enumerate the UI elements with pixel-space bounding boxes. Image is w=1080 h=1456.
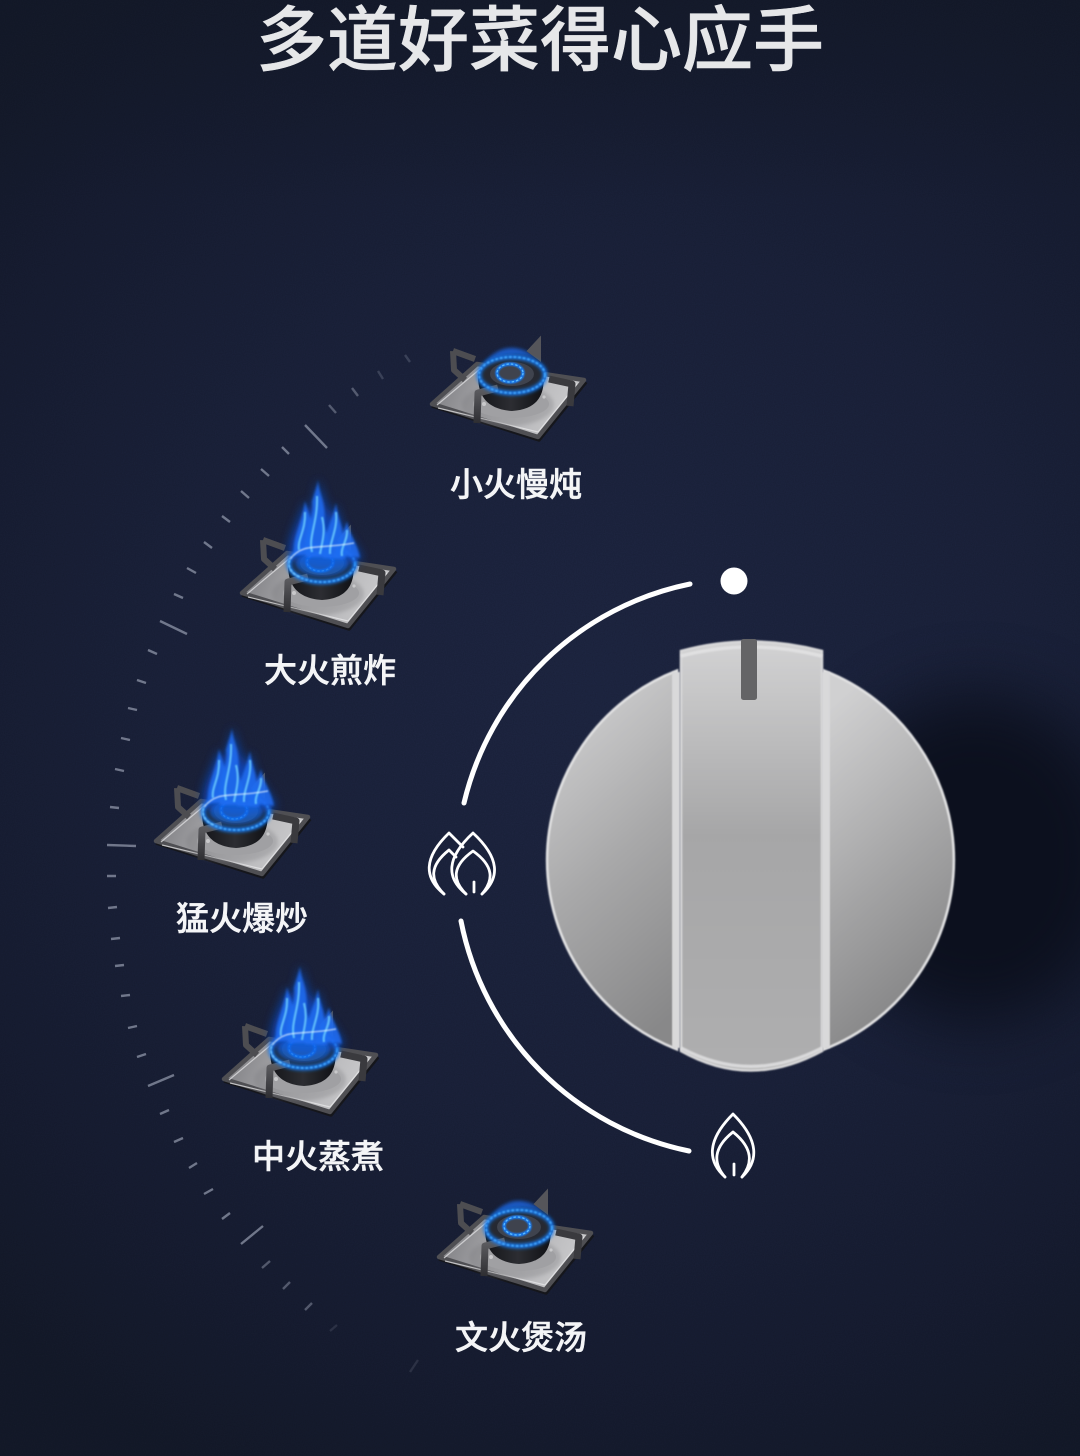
burner: low simmer [432,338,586,440]
bar rims [681,647,822,1066]
arc: high to low [461,921,689,1151]
burner: gentle soup [439,1191,593,1293]
title: 多道好菜得心应手 [256,2,824,81]
label: high fry: 大火煎炸 [264,652,396,689]
label: medium steam: 中火蒸煮 [252,1138,384,1175]
scale ticks arc [107,355,418,1372]
off position dot [720,568,748,594]
knob right wing [824,671,954,1049]
groove highlights [672,672,680,1048]
knob centre bar [681,642,822,1070]
burner: medium steam [224,965,378,1115]
icon: double flame [429,833,495,894]
label: gentle soup: 文火煲汤 [455,1319,587,1356]
icon: single flame [712,1114,754,1177]
label: low simmer: 小火慢炖 [450,466,582,503]
burner: max stir-fry [156,727,310,877]
control knob [547,639,954,1070]
label: max stir-fry: 猛火爆炒 [176,900,308,937]
burner: high fry [242,479,396,629]
dial shadow [825,693,1080,1023]
indicator mark [741,639,757,700]
knob left wing [547,671,677,1049]
arc: off to high [464,584,690,803]
